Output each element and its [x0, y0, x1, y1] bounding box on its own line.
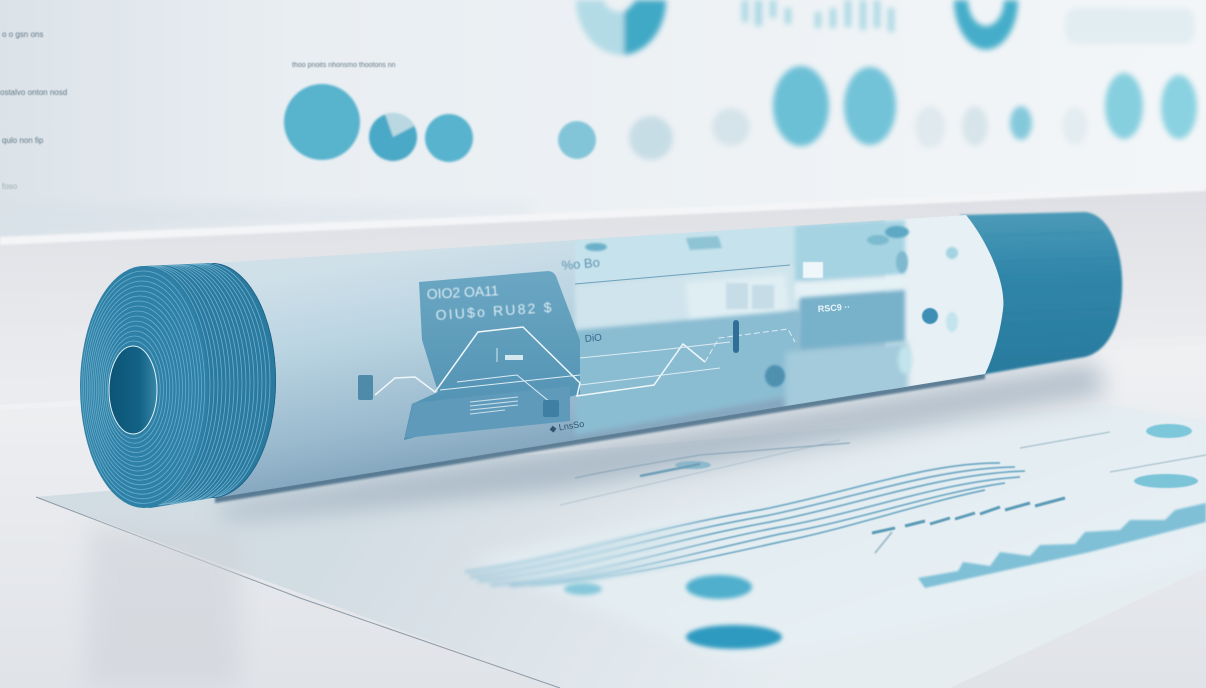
center blue panel: [575, 310, 800, 435]
roll front face: [80, 266, 208, 508]
printed ovals: [564, 575, 782, 649]
printed panel: dark label: OIU$o RU82 $: [435, 299, 552, 323]
bright band: [575, 262, 800, 335]
board text: [0, 30, 396, 191]
printed top rule and marks: [358, 226, 958, 417]
blurred chart circles: [284, 84, 596, 162]
printed small lines: [560, 432, 1206, 553]
roll body: [215, 215, 1003, 498]
printed bar chart: [918, 503, 1206, 588]
board text: ostalvo onton nosd: [0, 88, 67, 97]
printed small labels: [549, 255, 851, 434]
right white band: [795, 275, 905, 300]
board text: qulo non fip: [2, 136, 44, 145]
printed small labels: %o Bo: [561, 255, 600, 273]
board text: foso: [2, 182, 18, 191]
printed wave chart left: [464, 524, 687, 590]
table surface: [0, 335, 1206, 688]
bright inset panel: [686, 274, 788, 320]
printed secondary lines: [440, 329, 795, 402]
right top band: [795, 220, 905, 282]
roll right end: blue band: [960, 212, 1122, 376]
printed small labels: DiO: [584, 333, 603, 345]
printed panel: dark label: [404, 271, 580, 440]
roll core hole: [109, 346, 157, 434]
white sheet segment: [885, 215, 1004, 390]
back wall: [0, 0, 1206, 420]
paper sheet: [36, 405, 1206, 688]
right lower panel: [785, 342, 908, 415]
printed line chart: [375, 327, 705, 396]
wall shading: [0, 190, 1206, 410]
roll: [70, 200, 1122, 515]
table reflection and roll shadow: [85, 362, 1105, 688]
roll left end: [80, 263, 276, 508]
printed wrap sections: [575, 200, 1010, 435]
roll side edge with wrapped layers: [144, 263, 276, 508]
printed dash bars: [872, 498, 1065, 533]
printed small labels: RSC9 ··: [817, 302, 851, 314]
background display board: [0, 0, 1206, 245]
printed small labels: ◆ LnsSo: [549, 419, 585, 434]
printed lower tag: [405, 386, 570, 438]
board text: thoo pnoits nhonsmo thootons nn: [292, 62, 396, 69]
right mid panel: [800, 290, 905, 352]
board text: o o gsn ons: [2, 30, 43, 39]
top cyan band: [576, 229, 794, 283]
printed panel: dark label: OIO2 OA11: [426, 282, 499, 302]
paper lighter printed area: [470, 408, 1206, 665]
printed wave chart right: [612, 462, 1026, 576]
